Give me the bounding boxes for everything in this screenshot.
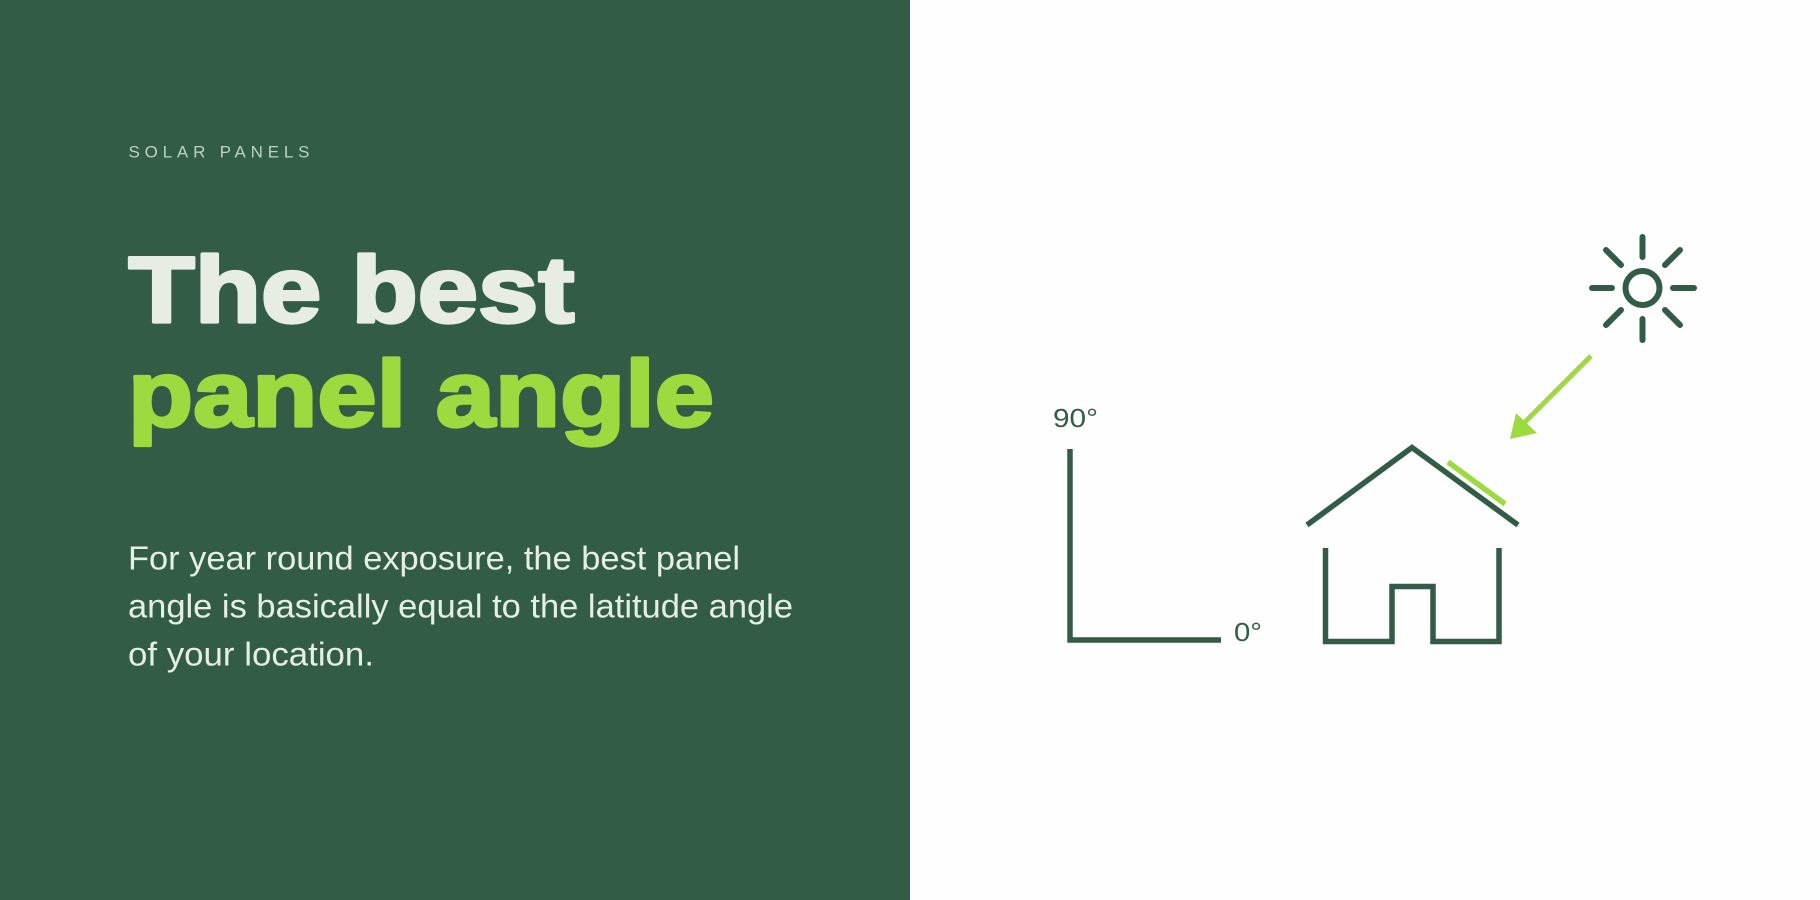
- title line 2: panel angle: [128, 341, 714, 446]
- angle axes: [1070, 449, 1221, 640]
- icon: sun: [1592, 237, 1694, 340]
- icon: house: [1307, 448, 1518, 642]
- body line 3: of your location.: [128, 636, 374, 672]
- title: [128, 237, 714, 446]
- label: 0 degrees: 0°: [1234, 617, 1262, 647]
- body line 2: angle is basically equal to the latitude angle: [128, 588, 793, 624]
- solar panel on roof: [1448, 462, 1505, 504]
- label: 90 degrees: 90°: [1053, 403, 1098, 433]
- house roof: [1307, 448, 1518, 525]
- panel: left green background: [0, 0, 910, 900]
- arrow: sunlight to panel: [1510, 356, 1591, 439]
- title line 1: The best: [128, 237, 574, 342]
- body line 1: For year round exposure, the best panel: [128, 540, 740, 576]
- eyebrow label: SOLAR PANELS: [128, 142, 310, 162]
- house walls and door: [1326, 548, 1499, 642]
- body text: [128, 540, 793, 672]
